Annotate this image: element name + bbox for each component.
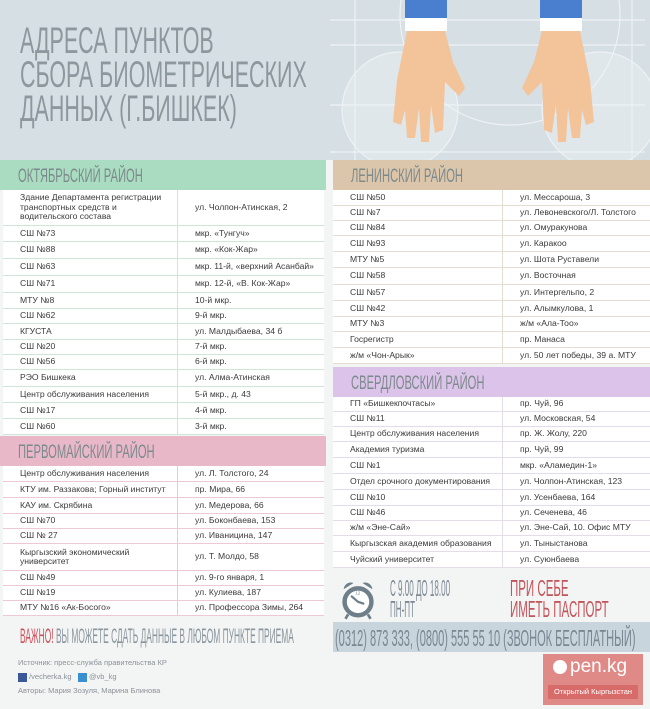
heading: Октябрьский [0, 160, 326, 190]
table: Ленинский: ул. 50 лет победы, 39 а. МТУ [520, 350, 636, 360]
text: bring passport: ПРИ СЕБЕ [510, 575, 569, 601]
table: Ленинский: ул. Интергельпо, 2 [520, 287, 594, 297]
table: Свердловский: ул. Чолпон-Атинская, 123 [520, 476, 622, 486]
table: Октябрьский: ул. Чолпон-Атинская, 2 [195, 202, 288, 212]
panel: Первомайский район [0, 436, 326, 616]
table: Октябрьский: 6-й мкр. [195, 356, 227, 366]
header background [0, 0, 650, 160]
table: Октябрьский: мкр. 12-й, «В. Кок-Жар» [195, 278, 290, 288]
phone band: (0312) 873 333, (0800) 555 55 10 (ЗВОНОК БЕСПЛАТНЫЙ) [335, 625, 636, 651]
table: Октябрьский: СШ №20 [20, 341, 55, 351]
table: Свердловский: ул. Усенбаева, 164 [520, 492, 595, 502]
table: Октябрьский: мкр. «Тунгуч» [195, 228, 250, 238]
table: Октябрьский: 9-й мкр. [195, 310, 227, 320]
table: Ленинский: ул. Мессароша, 3 [520, 192, 590, 202]
table: Свердловский: ул. Сеченева, 46 [520, 507, 587, 517]
table: Ленинский: СШ №93 [350, 238, 385, 248]
heading: Октябрьский: ОКТЯБРЬСКИЙ РАЙОН [18, 166, 143, 187]
table: Ленинский: СШ №42 [350, 303, 385, 313]
title: АДРЕСА ПУНКТОВ [20, 20, 214, 61]
table: Ленинский: ул. Алымкулова, 1 [520, 303, 593, 313]
table: Ленинский: пр. Манаса [520, 334, 565, 344]
heading: Свердловский: СВЕРДЛОВСКИЙ РАЙОН [351, 373, 484, 394]
heading: Первомайский [0, 436, 326, 466]
text: bring passport: ИМЕТЬ ПАСПОРТ [510, 596, 609, 622]
table: Октябрьский: СШ №17 [20, 405, 55, 415]
text: opening hours: С 9.00 ДО 18.00 [390, 575, 450, 601]
logo: open.kg: pen.kg [570, 656, 627, 677]
text: opening hours: ПН-ПТ [390, 596, 415, 622]
left hand [393, 0, 465, 142]
logo: open.kg: Открытый Кыргызстан [554, 687, 632, 696]
panel: Ленинский район [333, 160, 650, 364]
table: Первомайский: СШ №70 [20, 515, 55, 525]
table: Октябрьский: водительского состава [20, 211, 111, 221]
table: Свердловский: ул. Московская, 54 [520, 413, 595, 423]
table: Свердловский: Академия туризма [350, 444, 424, 454]
table: Октябрьский: ул. Малдыбаева, 34 б [195, 326, 282, 336]
table: Октябрьский: СШ №71 [20, 278, 55, 288]
table: Свердловский: Отдел срочного документирования [350, 476, 490, 486]
icon: alarm clock: 12 [355, 591, 361, 596]
table: Свердловский: ж/м «Эне-Сай» [350, 522, 410, 532]
panel: Свердловский район [333, 367, 650, 568]
table: Октябрьский: транспортных средств и [20, 202, 117, 212]
table: Первомайский: СШ №49 [20, 572, 55, 582]
title: ДАННЫХ (Г.БИШКЕК) [20, 88, 237, 129]
table: Первомайский: ул. Боконбаева, 153 [195, 515, 275, 525]
table: Свердловский: Центр обслуживания населения [350, 428, 479, 438]
table: Ленинский: СШ №50 [350, 192, 385, 202]
table: Октябрьский: МТУ №8 [20, 295, 54, 305]
table: Первомайский: ул. Иваницина, 147 [195, 530, 272, 540]
table: Свердловский: ул. Суюнбаева [520, 554, 579, 564]
icon: alarm clock [342, 582, 374, 620]
table: Октябрьский: мкр. 11-й, «верхний Асанбай» [195, 261, 314, 271]
table: Ленинский: СШ №58 [350, 270, 385, 280]
table: Первомайский: Кыргызский экономический [20, 546, 129, 556]
table: Свердловский: СШ №11 [350, 413, 385, 423]
table: Октябрьский: КГУСТА [20, 326, 52, 336]
table: Первомайский: ул. 9-го января, 1 [195, 572, 264, 582]
heading: Ленинский: ЛЕНИНСКИЙ РАЙОН [351, 166, 463, 187]
table: Октябрьский: мкр. «Кок-Жар» [195, 244, 258, 254]
table: Ленинский: ул. Шота Руставели [520, 254, 599, 264]
heading: Первомайский: ПЕРВОМАЙСКИЙ РАЙОН [18, 442, 155, 463]
table: Первомайский: пр. Мира, 66 [195, 484, 245, 494]
table: Первомайский: ул. Т. Молдо, 58 [195, 551, 259, 561]
table: Октябрьский: СШ №56 [20, 356, 55, 366]
table: Ленинский: МТУ №3 [350, 318, 384, 328]
table: Первомайский: университет [20, 556, 69, 566]
table: Октябрьский: СШ №60 [20, 421, 55, 431]
callout: important: ВАЖНО! ВЫ МОЖЕТЕ СДАТЬ ДАННЫЕ В ЛЮБОМ ПУНКТЕ ПРИЕМА [20, 625, 294, 648]
table: Октябрьский: 10-й мкр. [195, 295, 231, 305]
text: opening hours [390, 575, 450, 622]
table: Ленинский: ул. Левоневского/Л. Толстого [520, 207, 636, 217]
table: Свердловский: СШ №10 [350, 492, 385, 502]
table: Октябрьский: СШ №63 [20, 261, 55, 271]
source text: Авторы: Мария Зозуля, Марина Блинова [18, 686, 160, 695]
table: Свердловский [333, 397, 650, 568]
table: Ленинский: СШ №57 [350, 287, 385, 297]
table: Свердловский: пр. Ж. Жолу, 220 [520, 428, 587, 438]
source text: /vecherka.kg @vb_kg [29, 672, 117, 681]
table: Первомайский: КТУ им. Раззакова; Горный институт [20, 484, 166, 494]
table: Октябрьский: 5-й мкр., д. 43 [195, 389, 251, 399]
table: Свердловский: Чуйский университет [350, 554, 434, 564]
table: Первомайский: ул. Кулиева, 187 [195, 587, 261, 597]
illustration: hands on scanner [330, 0, 650, 160]
table: Первомайский [3, 466, 324, 616]
logo: open.kg [543, 654, 643, 705]
text: bring passport [510, 575, 609, 622]
table: Ленинский [333, 190, 650, 364]
source text [18, 658, 167, 695]
table: Октябрьский: СШ №62 [20, 310, 55, 320]
table: Ленинский: ул. Омуракунова [520, 222, 587, 232]
table: Свердловский: пр. Чуй, 99 [520, 444, 563, 454]
table: Свердловский: Кыргызская академия образования [350, 538, 491, 548]
table: Октябрьский: Центр обслуживания населения [20, 389, 149, 399]
table: Октябрьский: СШ №73 [20, 228, 55, 238]
table: Октябрьский: 3-й мкр. [195, 421, 227, 431]
table: Свердловский: мкр. «Аламедин-1» [520, 460, 597, 470]
table: Ленинский: ул. Каракоо [520, 238, 567, 248]
table: Свердловский: пр. Чуй, 96 [520, 398, 563, 408]
table: Свердловский: ул. Тыныстанова [520, 538, 588, 548]
table: Первомайский: ул. Л. Толстого, 24 [195, 468, 268, 478]
table: Ленинский: ж/м «Чон-Арык» [350, 350, 415, 360]
table: Ленинский: МТУ №5 [350, 254, 384, 264]
table: Ленинский: ул. Восточная [520, 270, 576, 280]
heading: Свердловский [333, 367, 650, 397]
table: Первомайский: МТУ №16 «Ак-Босого» [20, 602, 111, 612]
title: СБОРА БИОМЕТРИЧЕСКИХ [20, 54, 307, 95]
table: Первомайский: ул. Профессора Зимы, 264 [195, 602, 303, 612]
table: Октябрьский [3, 190, 324, 435]
table: Октябрьский: Здание Департамента регистрации [20, 192, 161, 202]
table: Первомайский: ул. Медерова, 66 [195, 500, 264, 510]
table: Свердловский: СШ №46 [350, 507, 385, 517]
table: Свердловский: СШ №1 [350, 460, 380, 470]
table: Ленинский: Госрегистр [350, 334, 394, 344]
table: Первомайский: Центр обслуживания населения [20, 468, 149, 478]
table: Ленинский: СШ №84 [350, 222, 385, 232]
source text: Источник: пресс-служба правительства КР [18, 658, 167, 667]
table: Первомайский: СШ №19 [20, 587, 55, 597]
table: Ленинский: ж/м «Ала-Тоо» [520, 318, 579, 328]
title [20, 20, 307, 129]
table: Октябрьский: СШ №88 [20, 244, 55, 254]
table: Октябрьский: РЭО Бишкека [20, 372, 76, 382]
table: Ленинский: СШ №7 [350, 207, 380, 217]
table: Свердловский: ул. Эне-Сай, 10. Офис МТУ [520, 522, 631, 532]
table: Октябрьский: 7-й мкр. [195, 341, 227, 351]
table: Свердловский: ГП «Бишкекпочтасы» [350, 398, 435, 408]
table: Октябрьский: 4-й мкр. [195, 405, 227, 415]
table: Октябрьский: ул. Алма-Атинская [195, 372, 270, 382]
table: Первомайский: СШ № 27 [20, 530, 58, 540]
table: Первомайский: КАУ им. Скрябина [20, 500, 92, 510]
panel: Октябрьский район [0, 160, 326, 435]
right hand [522, 0, 594, 142]
heading: Ленинский [333, 160, 650, 190]
